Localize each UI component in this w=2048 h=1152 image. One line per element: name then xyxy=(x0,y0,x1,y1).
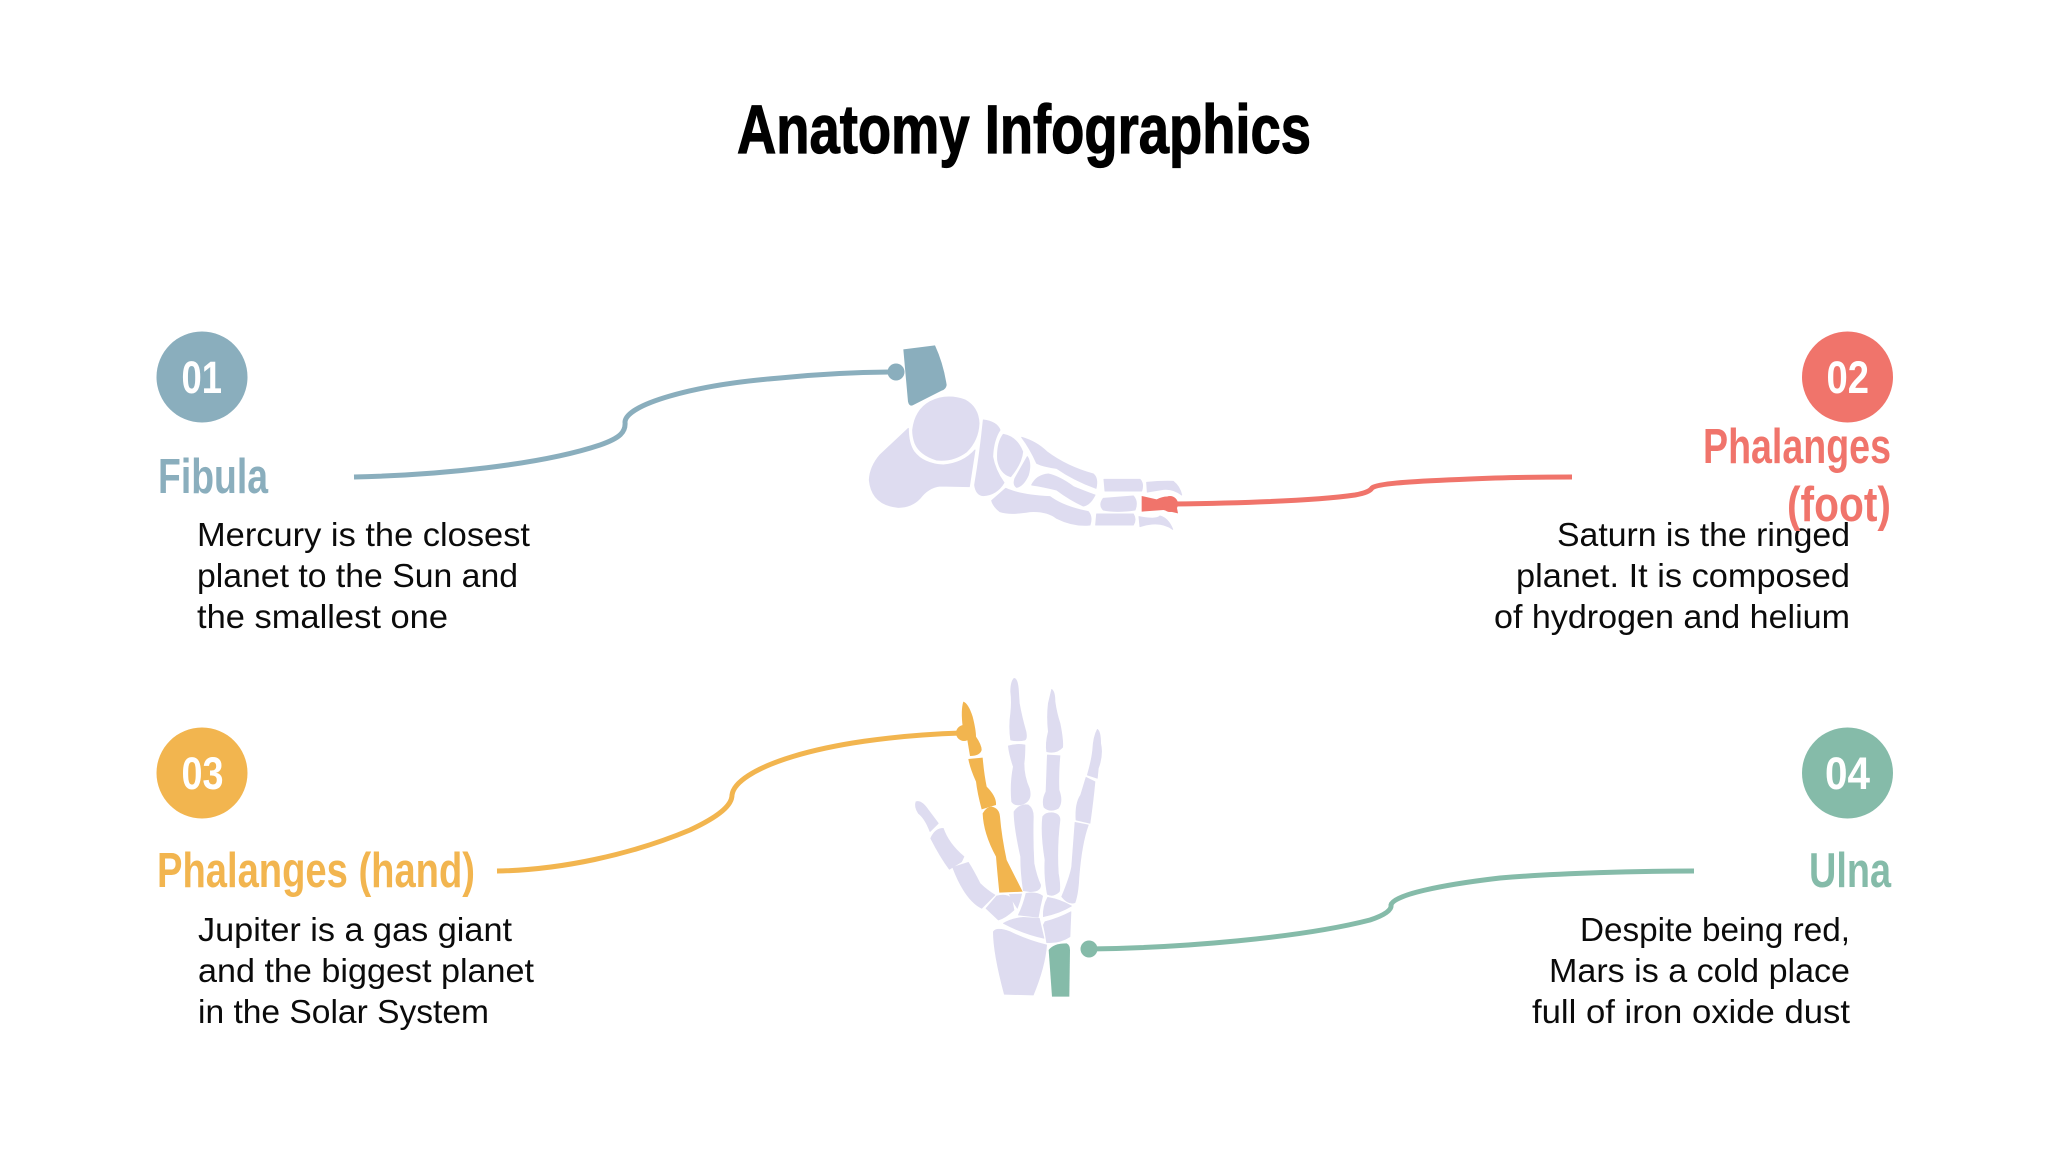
text block: Saturn xyxy=(1494,517,1850,636)
panel: ulna xyxy=(1532,728,1893,1031)
number badge 01: 01 xyxy=(182,352,222,403)
text block: Saturn: Saturn is the ringed xyxy=(1557,517,1850,554)
heading: Phalanges (foot): (foot) xyxy=(1787,478,1891,532)
highlighted fibula bone xyxy=(903,345,947,406)
heading: Phalanges (foot): Phalanges xyxy=(1703,420,1891,474)
number badge 03 xyxy=(156,728,248,818)
text block: Jupiter: Jupiter is a gas giant xyxy=(198,912,513,949)
number badge 01 xyxy=(156,332,248,422)
text block: Jupiter: and the biggest planet xyxy=(198,953,535,990)
text block: Mars: Despite being red, xyxy=(1580,912,1850,949)
text block: Mercury: the smallest one xyxy=(197,599,448,636)
connector: fibula xyxy=(354,364,904,477)
number badge 03: 03 xyxy=(182,748,224,799)
heading: Phalanges (hand): Phalanges (hand) xyxy=(157,844,475,898)
highlighted ulna bone xyxy=(1049,943,1070,997)
highlighted toe phalanx xyxy=(1142,496,1178,513)
text block: Mercury: Mercury is the closest xyxy=(197,517,531,554)
panel: phalanges hand xyxy=(156,728,535,1031)
text block: Saturn: of hydrogen and helium xyxy=(1494,599,1850,636)
number badge 02 xyxy=(1802,332,1893,422)
number badge 04: 04 xyxy=(1825,748,1870,799)
icon: hand skeleton xyxy=(915,678,1102,997)
icon: foot skeleton xyxy=(869,345,1182,529)
text block: Jupiter: in the Solar System xyxy=(198,994,489,1031)
text block: Mercury xyxy=(197,517,531,636)
title: Anatomy Infographics xyxy=(737,91,1311,168)
text block: Mars xyxy=(1532,912,1851,1031)
foot bones xyxy=(869,397,1182,529)
connector: phalanges hand xyxy=(497,725,972,871)
connector: ulna xyxy=(1080,871,1694,958)
text block: Mars: Mars is a cold place xyxy=(1549,953,1850,990)
text block: Jupiter xyxy=(198,912,535,1031)
panel: fibula xyxy=(156,332,531,636)
panel: phalanges foot xyxy=(1494,332,1893,636)
number badge 04 xyxy=(1802,728,1893,818)
hand bones xyxy=(915,678,1102,995)
heading: Fibula: Fibula xyxy=(158,450,269,504)
number badge 02: 02 xyxy=(1826,352,1869,403)
text block: Saturn: planet. It is composed xyxy=(1516,558,1850,595)
connector: phalanges foot xyxy=(1162,477,1572,512)
heading: Phalanges (foot) xyxy=(1703,420,1891,532)
text block: Mercury: planet to the Sun and xyxy=(197,558,518,595)
highlighted index finger xyxy=(961,702,1023,893)
heading: Ulna: Ulna xyxy=(1809,844,1892,898)
text block: Mars: full of iron oxide dust xyxy=(1532,994,1851,1031)
